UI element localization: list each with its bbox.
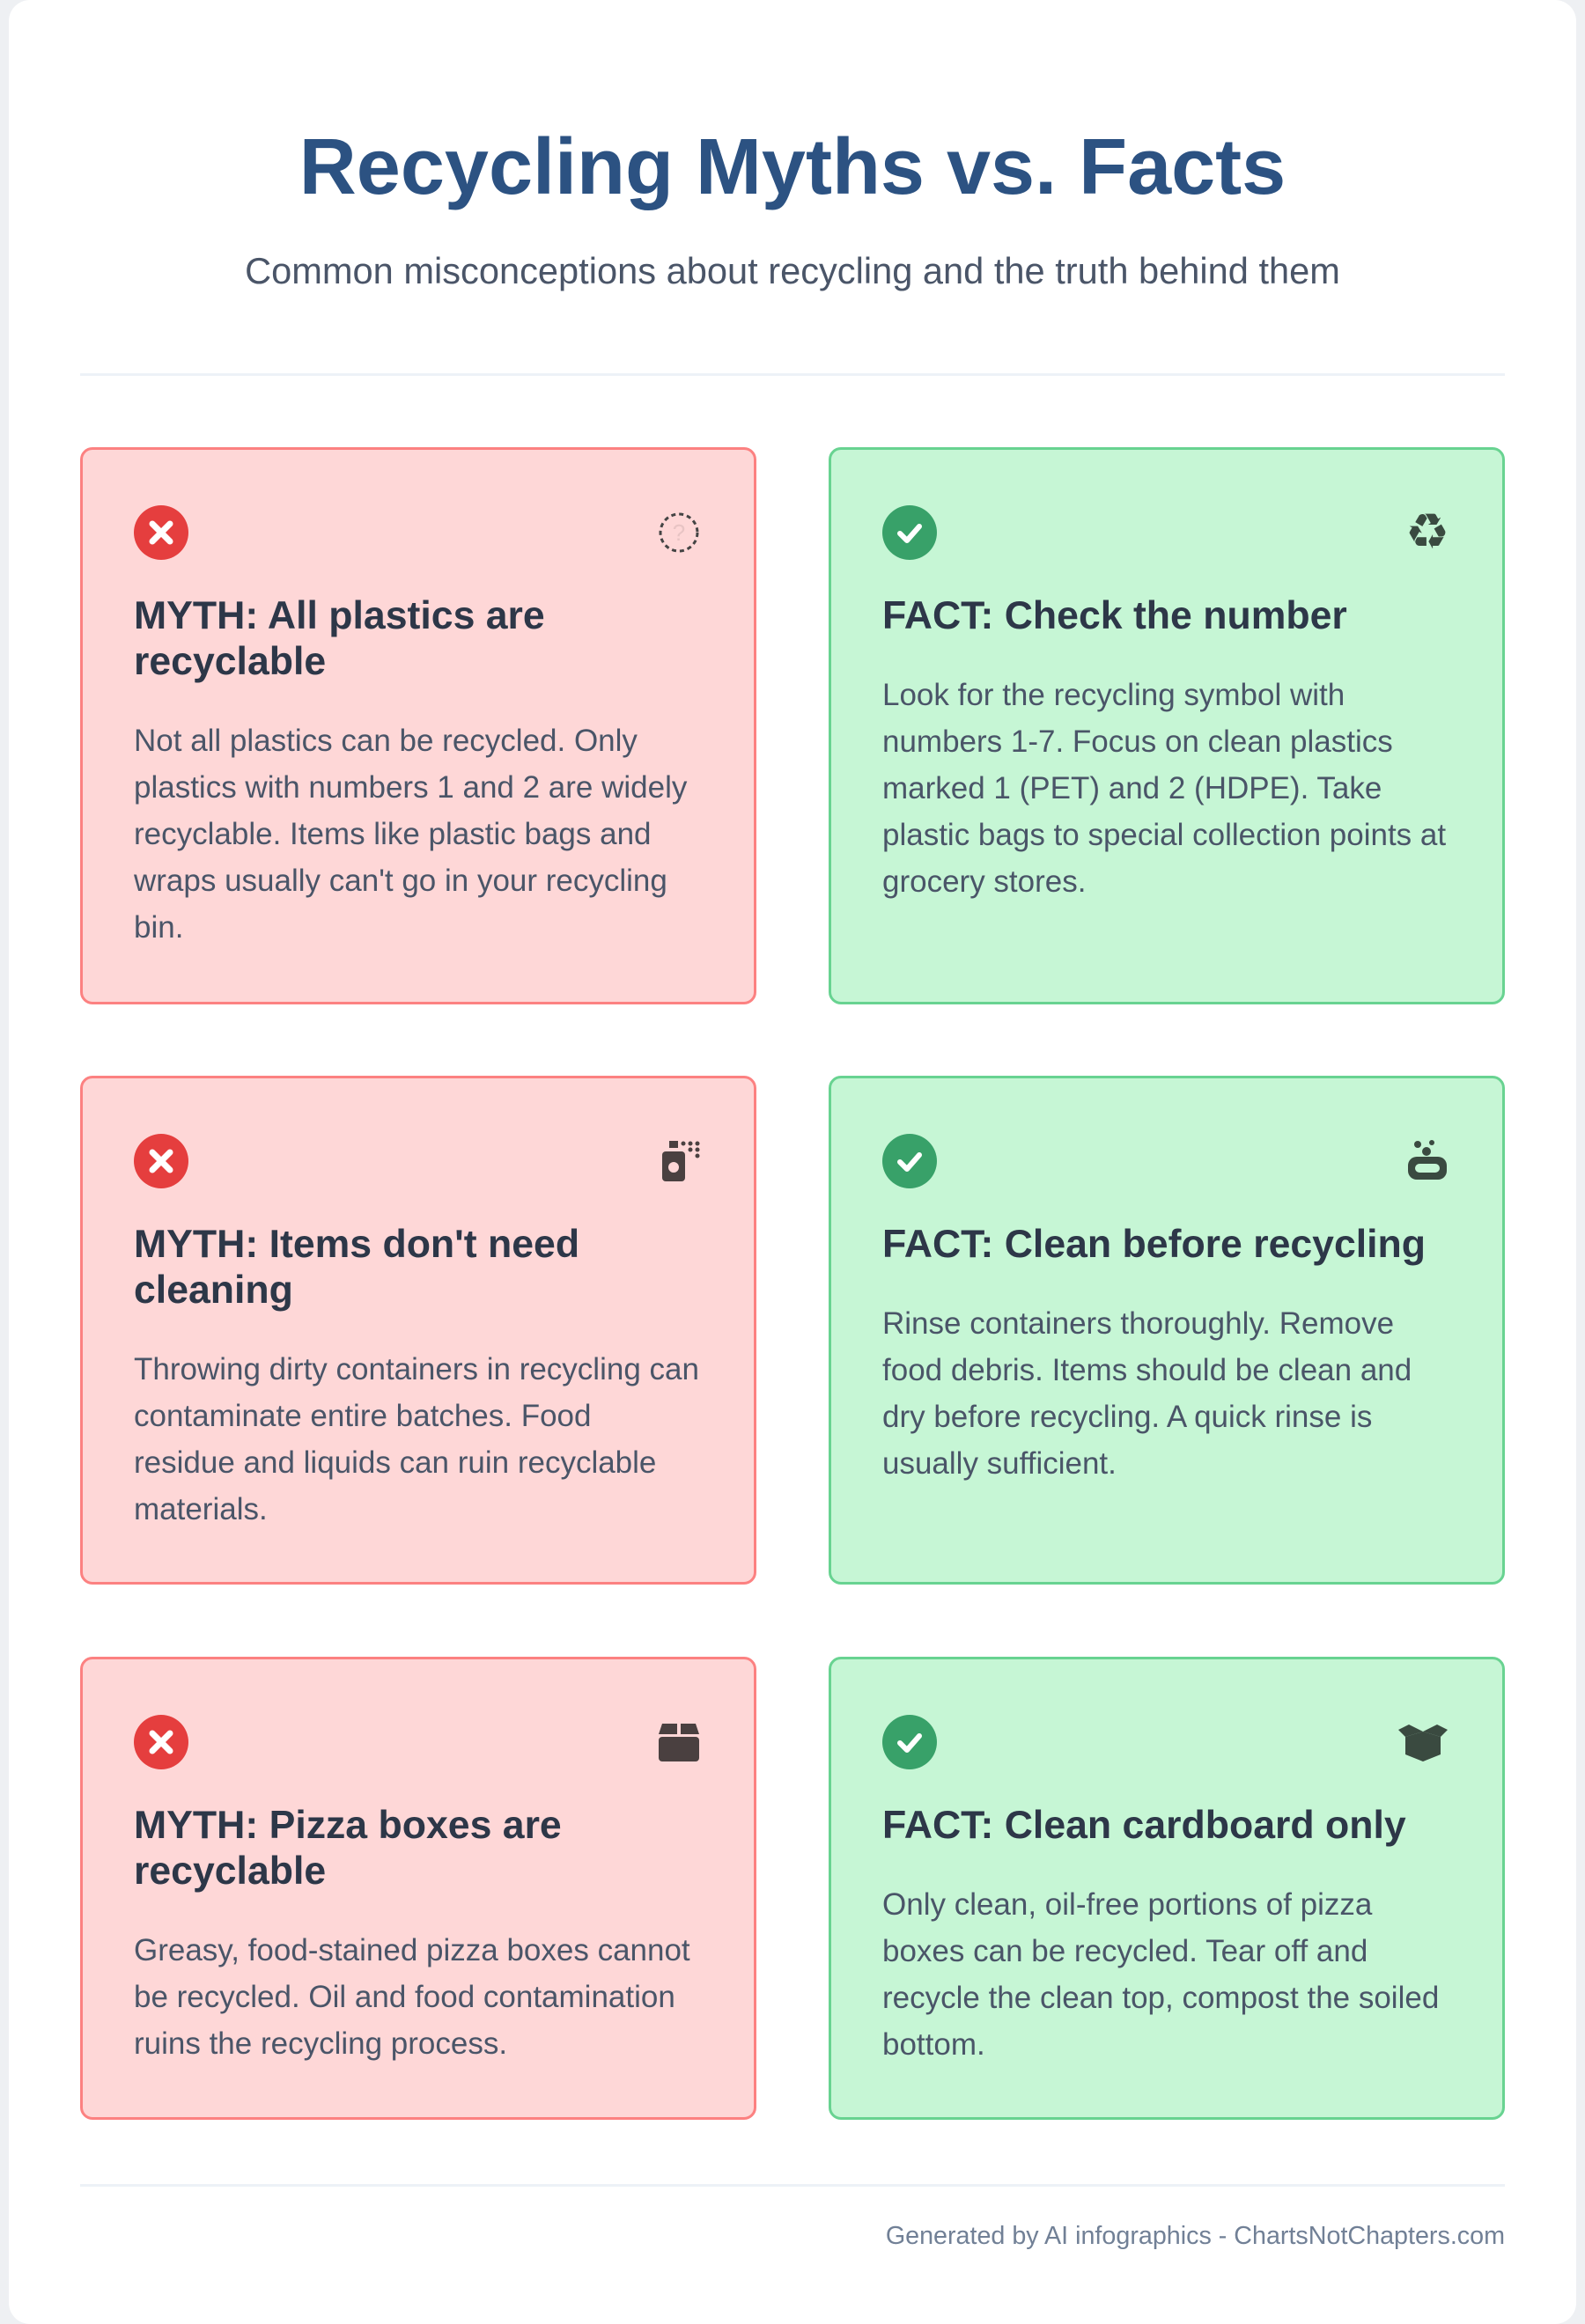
heading: FACT: Clean before recycling <box>882 1223 1426 1266</box>
icon: open box <box>1398 1725 1448 1761</box>
icon: check <box>882 1715 937 1769</box>
panel: myth cleaning <box>80 1076 756 1585</box>
icon: question dashed circle: ? <box>673 519 685 546</box>
body text: residue and liquids can ruin recyclable materials. <box>134 1445 656 1526</box>
icon: red x <box>134 1715 188 1769</box>
heading: MYTH: All plastics are recyclable <box>134 594 545 683</box>
panel: fact number <box>829 447 1505 1004</box>
heading: FACT: Check the number <box>882 594 1347 637</box>
heading: MYTH: Items don't need cleaning <box>134 1223 579 1312</box>
panel: myth plastics <box>80 447 756 1004</box>
title: Recycling Myths vs. Facts <box>299 123 1286 211</box>
icon: spray can <box>662 1141 699 1181</box>
body text: Only clean, oil-free portions of pizza boxes can be recycled. Tear off and recycle the clean top, compost the soiled bottom. <box>882 1887 1439 2062</box>
heading: FACT: Clean cardboard only <box>882 1804 1406 1847</box>
icon: box <box>659 1724 699 1761</box>
icon: check <box>882 1134 937 1188</box>
panel: fact cardboard <box>829 1657 1505 2120</box>
body text: Throwing dirty containers in recycling can contaminate entire batches. Food <box>134 1352 699 1433</box>
icon: red x <box>134 505 188 560</box>
heading: MYTH: Pizza boxes are recyclable <box>134 1804 562 1893</box>
subtitle: Common misconceptions about recycling and the truth behind them <box>245 250 1340 291</box>
body text: Not all plastics can be recycled. Only plastics with numbers 1 and 2 are widely recyclable. Items like plastic bags and wraps usually can't go in your recycling bin. <box>134 724 687 945</box>
panel: fact clean <box>829 1076 1505 1585</box>
panel: myth pizza <box>80 1657 756 2120</box>
body text: Greasy, food-stained pizza boxes cannot be recycled. Oil and food contamination ruins the recycling process. <box>134 1933 690 2061</box>
icon: check <box>882 505 937 560</box>
body text <box>134 1352 699 1526</box>
icon: soap <box>1408 1140 1447 1180</box>
icon: question dashed circle <box>659 512 699 553</box>
body text: Look for the recycling symbol with numbers 1-7. Focus on clean plastics marked 1 (PET) and 2 (HDPE). Take plastic bags to special collection points at grocery stores. <box>882 678 1446 899</box>
footer: Generated by AI infographics - ChartsNotChapters.com <box>886 2222 1505 2250</box>
icon: red x <box>134 1134 188 1188</box>
icon: recycle: ♻ <box>1405 504 1449 561</box>
body text: Rinse containers thoroughly. Remove food debris. Items should be clean and dry before recycling. A quick rinse is usually sufficient. <box>882 1306 1412 1481</box>
